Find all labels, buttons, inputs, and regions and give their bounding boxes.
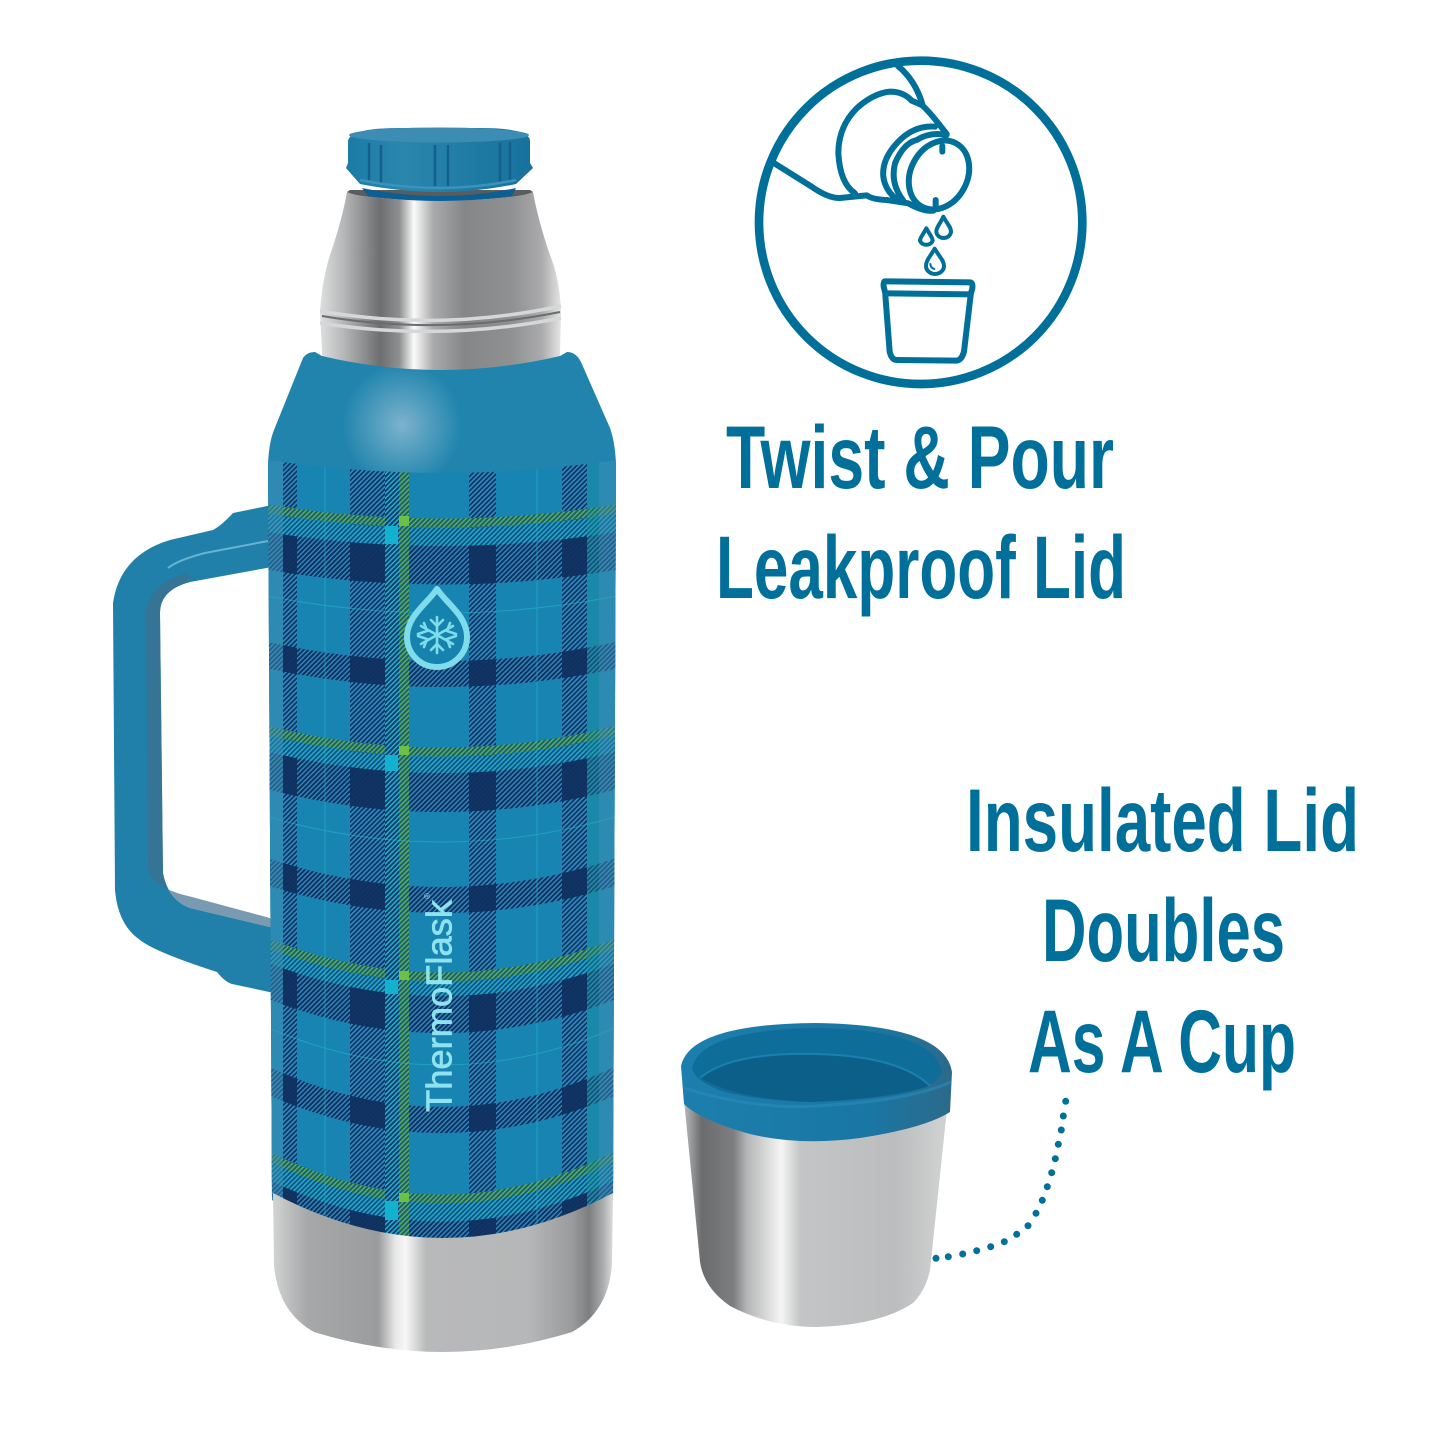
body edge fades (266, 455, 617, 1255)
bottle cap (346, 128, 533, 201)
bottle body (262, 352, 622, 1352)
cup lid illustration (681, 1023, 952, 1327)
heading: Insulated Lid Doubles As A Cup: As A Cup (1028, 991, 1296, 1091)
heading: Twist & Pour Leakproof Lid: Twist & Pour (726, 407, 1114, 507)
plaid dark vertical bands (283, 455, 587, 1255)
plaid pattern (262, 455, 622, 1255)
cup steel body (683, 1090, 949, 1327)
plaid vertical underlay (283, 455, 587, 1255)
heading: Twist & Pour Leakproof Lid (716, 407, 1126, 617)
icon: pouring bottle into cup (759, 61, 1082, 384)
bottle handle (113, 505, 274, 993)
logo: snowflake drop (407, 589, 467, 667)
brand name: ThermoFlask (418, 899, 460, 1112)
bottle steel base (273, 1193, 613, 1352)
plaid dark horizontal bands (262, 549, 622, 1225)
plaid central stripe (385, 455, 599, 1255)
plaid thin lines (262, 455, 622, 1255)
heading: Twist & Pour Leakproof Lid: Leakproof Lid (716, 517, 1126, 617)
cup blue rim (681, 1023, 952, 1141)
dotted connector (932, 1098, 1069, 1262)
bottle illustration (113, 61, 1359, 1352)
heading: Insulated Lid Doubles As A Cup (966, 770, 1359, 1091)
plaid teal and green bands (262, 508, 622, 1212)
bottle neck (320, 190, 561, 372)
brand name: ® (423, 893, 432, 899)
heading: Insulated Lid Doubles As A Cup: Doubles (1042, 880, 1285, 980)
